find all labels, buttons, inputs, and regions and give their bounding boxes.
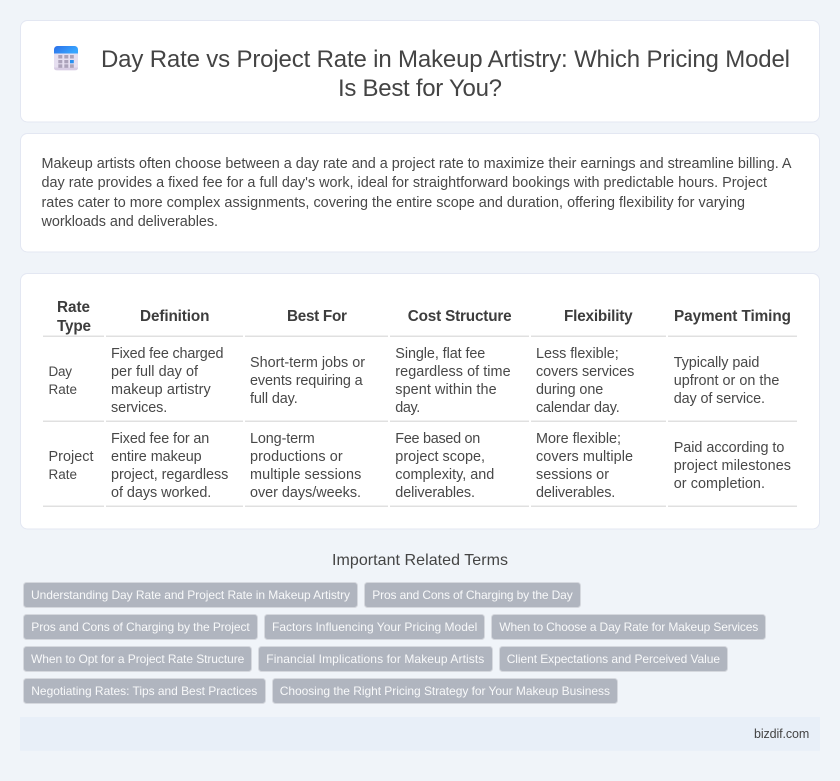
table row: day rate: Fixed fee charged — [111, 346, 224, 362]
tag — [258, 646, 492, 672]
tag — [24, 582, 358, 608]
panel: title card — [20, 20, 820, 122]
tag — [264, 614, 484, 640]
table row: day rate: regardless of time — [395, 364, 511, 380]
table row: day rate: Less flexible; — [536, 346, 619, 362]
table row: day rate: covers services — [536, 364, 634, 380]
text block: introduction paragraph: workloads and deliverables. — [40, 214, 218, 230]
tag: When to Choose a Day Rate for Makeup Services — [499, 620, 758, 634]
table row: day rate: full day. — [250, 391, 298, 407]
table row: project rate: project scope, — [395, 449, 485, 465]
heading: important related terms: Important Related Terms — [332, 552, 508, 569]
tag: Pros and Cons of Charging by the Project — [31, 620, 250, 634]
table row: project rate: covers multiple — [536, 449, 633, 465]
table row: project rate: Paid according to — [674, 440, 784, 456]
table row: project rate: multiple sessions — [250, 467, 361, 483]
table row: day rate: events requiring a — [250, 373, 363, 389]
tag — [24, 678, 266, 704]
footer bar — [20, 717, 820, 751]
title — [101, 46, 790, 102]
table row: project rate: deliverables. — [536, 485, 615, 501]
table row: day rate: during one — [536, 382, 603, 398]
table row: project rate: entire makeup — [111, 449, 202, 465]
table row: day rate: per full day of — [111, 364, 199, 380]
tag: Understanding Day Rate and Project Rate in Makeup Artistry — [31, 588, 350, 602]
table row: day rate: upfront or on the — [674, 373, 779, 389]
table row: project rate: sessions or — [536, 467, 609, 483]
table row: day rate: Day — [48, 364, 72, 379]
table row: project rate: deliverables. — [395, 485, 475, 501]
table row: day rate: Rate — [48, 382, 77, 397]
text block: introduction paragraph: day rate provides a fixed fee for a full day's work, ideal for straightforward bookings with predictable hours. Project — [42, 175, 767, 191]
tag — [24, 646, 252, 672]
table row: day rate — [48, 346, 779, 416]
table row: day rate: spent within the — [395, 382, 497, 398]
table row: project rate — [48, 431, 791, 501]
title: Is Best for You? — [338, 75, 502, 102]
table header row: Best For — [287, 308, 347, 325]
tag: Financial Implications for Makeup Artists — [266, 652, 484, 666]
table row: day rate: Typically paid — [674, 355, 759, 371]
table row: project rate: project, regardless — [111, 467, 228, 483]
table header row — [57, 299, 791, 335]
table row: project rate: Fee based on — [395, 431, 480, 447]
table row: project rate: Rate — [48, 467, 77, 482]
panel: comparison table — [20, 274, 820, 529]
table row: project rate: of days worked. — [111, 485, 211, 501]
text block: introduction paragraph — [40, 156, 792, 230]
table row: project rate: over days/weeks. — [250, 485, 361, 501]
table header row: Payment Timing — [674, 308, 791, 325]
table row: day rate: Short-term jobs or — [250, 355, 365, 371]
panel: introduction — [20, 134, 820, 252]
table row: day rate: services. — [111, 400, 167, 416]
tag — [272, 678, 618, 704]
table row: project rate: Long-term — [250, 431, 315, 447]
tag: Factors Influencing Your Pricing Model — [272, 620, 477, 634]
table header row: Rate — [57, 299, 90, 316]
table row: project rate: Fixed fee for an — [111, 431, 209, 447]
table row: project rate: complexity, and — [395, 467, 494, 483]
tag: When to Opt for a Project Rate Structure — [31, 652, 245, 666]
table row: day rate: day. — [395, 400, 420, 416]
tag: Client Expectations and Perceived Value — [507, 652, 720, 666]
table row: day rate: calendar day. — [536, 400, 620, 416]
table row: project rate: productions or — [250, 449, 343, 465]
table row: day rate: Single, flat fee — [395, 346, 485, 362]
icon: calendar — [54, 46, 78, 70]
table header row: Flexibility — [564, 308, 633, 325]
tag — [24, 614, 258, 640]
text block: introduction paragraph: Makeup artists often choose between a day rate and a project rate to maximize their earnings and streamline billing. A — [42, 156, 792, 172]
table header row: Cost Structure — [408, 308, 512, 325]
tag: Negotiating Rates: Tips and Best Practices — [31, 684, 257, 698]
footer source text: bizdif.com — [754, 727, 809, 741]
panel: related term tags — [24, 582, 766, 704]
title: Day Rate vs Project Rate in Makeup Artistry: Which Pricing Model — [101, 46, 790, 73]
table header row: Definition — [140, 308, 210, 325]
tag — [500, 646, 728, 672]
table row: project rate: project milestones — [674, 458, 791, 474]
text block: introduction paragraph: rates cater to more complex assignments, covering the entire scope and duration, offering flexibility for varying — [42, 195, 745, 211]
table row: project rate: Project — [48, 449, 94, 465]
table row: day rate: day of service. — [674, 391, 765, 407]
tag — [364, 582, 580, 608]
table row: project rate: More flexible; — [536, 431, 621, 447]
tag: Pros and Cons of Charging by the Day — [372, 588, 573, 602]
tag: Choosing the Right Pricing Strategy for Your Makeup Business — [280, 684, 610, 698]
table row: project rate: or completion. — [674, 476, 765, 492]
table header row: Type — [57, 318, 91, 335]
tag — [492, 614, 766, 640]
table row: day rate: makeup artistry — [111, 382, 211, 398]
